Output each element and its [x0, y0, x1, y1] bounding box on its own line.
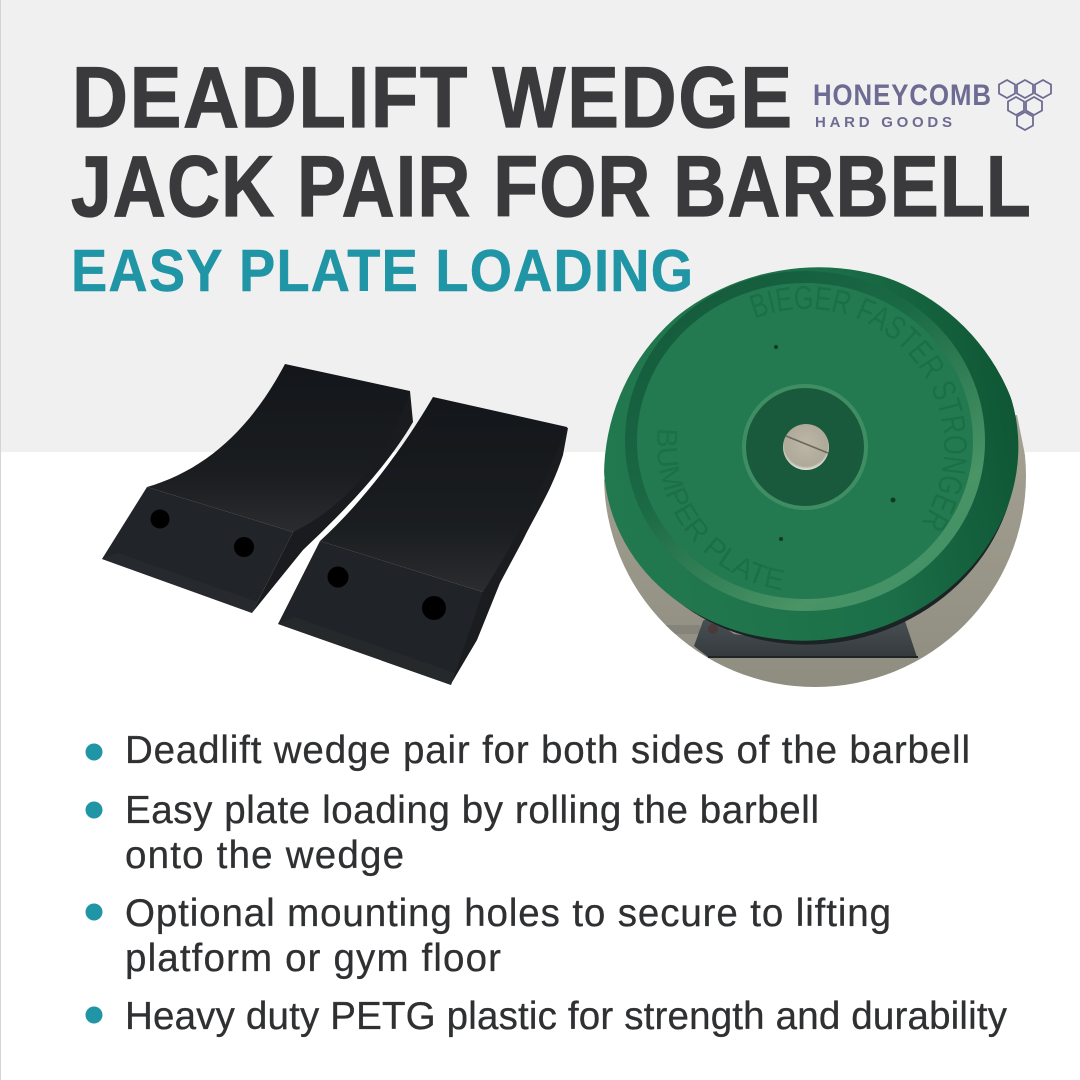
bullet 3: [86, 892, 891, 980]
left wedge front face: [102, 487, 293, 613]
wedge mounting screw: [708, 624, 718, 634]
bullet 1: Deadlift wedge pair for both sides of the barbell: [125, 729, 970, 772]
wedge base line: [708, 656, 918, 658]
bullet 4: Heavy duty PETG plastic for strength and durability: [125, 995, 1008, 1038]
plate embossed lettering: BIEGER FASTER STRONGER: [750, 286, 967, 531]
plate embossed lettering: [658, 286, 967, 590]
logo wordmark: HONEYCOMB: [813, 78, 991, 111]
plate embossed lettering: BUMPER PLATE: [658, 430, 784, 590]
bullet 2: [86, 789, 819, 877]
icon: honeycomb hexagons: [999, 80, 1051, 130]
right wedge bevel: [278, 617, 455, 685]
plate shadow: [678, 498, 1010, 645]
feature list: [86, 729, 1008, 1038]
photo: bumper plate on wedge: [604, 267, 1026, 687]
plate outer edge: [604, 267, 1018, 641]
title: JACK PAIR FOR BARBELL: [71, 138, 1031, 234]
product: pair of wedges: [102, 364, 568, 685]
title: [71, 50, 1031, 234]
subtitle: EASY PLATE LOADING: [71, 239, 693, 305]
right wedge side: [451, 427, 568, 684]
logo wordmark: HARD GOODS: [815, 114, 952, 131]
plate hub: [744, 386, 866, 508]
right wedge curved top: [320, 397, 567, 592]
right wedge front face: [278, 541, 483, 685]
left wedge: [102, 364, 413, 613]
floor: [600, 415, 1030, 690]
bullet 3: platform or gym floor: [125, 937, 501, 980]
logo: Honeycomb Hard Goods: [813, 78, 1051, 131]
title: DEADLIFT WEDGE: [72, 50, 792, 146]
plate rim ring: [631, 277, 979, 605]
barbell bolt: [783, 424, 829, 470]
bullet 3: Optional mounting holes to secure to lifting: [125, 892, 891, 935]
floor streak: [666, 625, 700, 634]
bullet 2: Easy plate loading by rolling the barbell: [125, 789, 819, 832]
left wedge mounting holes: [150, 510, 254, 557]
left wedge side: [252, 391, 413, 613]
left wedge bevel: [102, 553, 258, 613]
wedge under plate: [694, 618, 917, 657]
left wedge curved top: [147, 364, 410, 532]
logo wordmark: [813, 78, 991, 131]
plate rivets: [774, 345, 896, 541]
right wedge: [278, 397, 568, 685]
bullet 2: onto the wedge: [125, 834, 404, 877]
right wedge mounting holes: [328, 566, 446, 620]
